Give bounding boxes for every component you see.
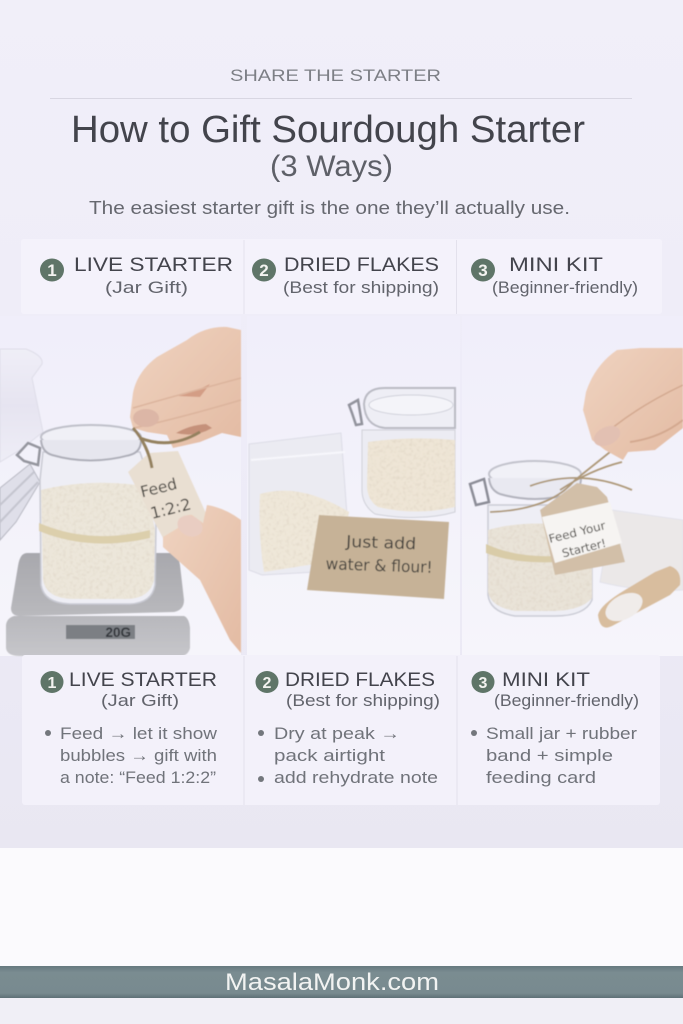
icon: wooden scoop: [598, 566, 680, 628]
detail column 3: mini kit: MINI KIT: [502, 670, 590, 691]
detail column 2: dried flakes: Dry at peak →: [274, 724, 400, 743]
detail column 1: live starter: Feed → let it show: [60, 724, 218, 743]
icon: bag of flour: [600, 510, 683, 590]
icon: kraft gift tag: [490, 452, 632, 575]
footer bar: [0, 966, 683, 998]
detail column 1: live starter: (Jar Gift): [101, 691, 179, 710]
detail column 2: dried flakes: pack airtight: [274, 746, 385, 765]
icon: top hand: [130, 327, 241, 448]
detail column 3: mini kit: 3: [479, 675, 488, 692]
top header 2: dried flakes: 2: [259, 261, 269, 280]
top header 1: live starter: (Jar Gift): [105, 278, 188, 297]
detail column 1: live starter: [40, 670, 218, 787]
detail column 2: dried flakes: (Best for shipping): [286, 691, 440, 710]
icon: zip bag of flakes: [249, 433, 351, 575]
icon: hand holding twine: [583, 348, 683, 460]
icon: small jar: [470, 461, 592, 616]
detail column 1: live starter: bubbles → gift with: [60, 746, 217, 765]
subtitle: (3 Ways): [270, 150, 393, 183]
icon: kraft note card: [307, 515, 449, 599]
icon: kraft gift tag: Feed Your: [547, 518, 607, 546]
detail column 2: dried flakes: DRIED FLAKES: [285, 670, 435, 691]
tagline: The easiest starter gift is the one they’ll actually use.: [89, 197, 570, 218]
top header 3: mini kit: (Beginner-friendly): [492, 278, 638, 297]
top header 1: live starter: 1: [47, 261, 57, 280]
detail column 3: mini kit: band + simple: [486, 746, 613, 765]
top header 2: dried flakes: (Best for shipping): [283, 278, 439, 297]
top header 3: mini kit: MINI KIT: [509, 254, 603, 276]
panel: bottom method details: [22, 655, 660, 805]
detail column 3: mini kit: (Beginner-friendly): [494, 691, 639, 710]
top header 1: live starter: LIVE STARTER: [74, 254, 233, 276]
detail column 2: dried flakes: 2: [263, 675, 272, 692]
icon: kraft note card: water & flour!: [325, 554, 433, 577]
icon: paper tag: Feed: [139, 475, 179, 501]
top header 1: live starter: [40, 254, 233, 297]
icon: bottom hand: [163, 505, 241, 653]
top header 2: dried flakes: DRIED FLAKES: [284, 254, 439, 276]
icon: glass jar with starter: [17, 425, 156, 604]
detail column 2: dried flakes: add rehydrate note: [274, 768, 438, 787]
icon: swing lid: [0, 464, 40, 540]
icon: kitchen scale: [6, 553, 190, 656]
icon: kraft note card: Just add: [345, 532, 417, 553]
icon: jar of flakes: [349, 388, 455, 518]
photo 1: live starter jar on scale: [0, 316, 241, 656]
title: How to Gift Sourdough Starter: [71, 109, 585, 151]
icon: paper tag: [128, 428, 209, 538]
top header 3: mini kit: [471, 254, 638, 297]
footer bar: MasalaMonk.com: [225, 969, 439, 996]
detail column 2: dried flakes: [256, 670, 440, 787]
eyebrow heading: SHARE THE STARTER: [230, 66, 441, 85]
icon: kitchen scale: 20G: [105, 625, 131, 640]
detail column 1: live starter: 1: [48, 675, 57, 692]
detail column 3: mini kit: Small jar + rubber: [486, 724, 637, 743]
detail column 3: mini kit: [471, 670, 639, 787]
top header 3: mini kit: 3: [478, 261, 488, 280]
detail column 1: live starter: LIVE STARTER: [69, 670, 217, 691]
icon: glass jug: [0, 349, 43, 462]
icon: kraft gift tag: Starter!: [561, 536, 608, 560]
detail column 3: mini kit: feeding card: [486, 768, 596, 787]
icon: paper tag: 1:2:2: [148, 494, 193, 523]
photo 3: mini kit: [462, 316, 683, 656]
top header 2: dried flakes: [252, 254, 439, 297]
panel: top method headers: [21, 239, 662, 314]
detail column 1: live starter: a note: “Feed 1:2:2”: [60, 768, 216, 787]
photo 2: dried flakes: [247, 316, 460, 656]
